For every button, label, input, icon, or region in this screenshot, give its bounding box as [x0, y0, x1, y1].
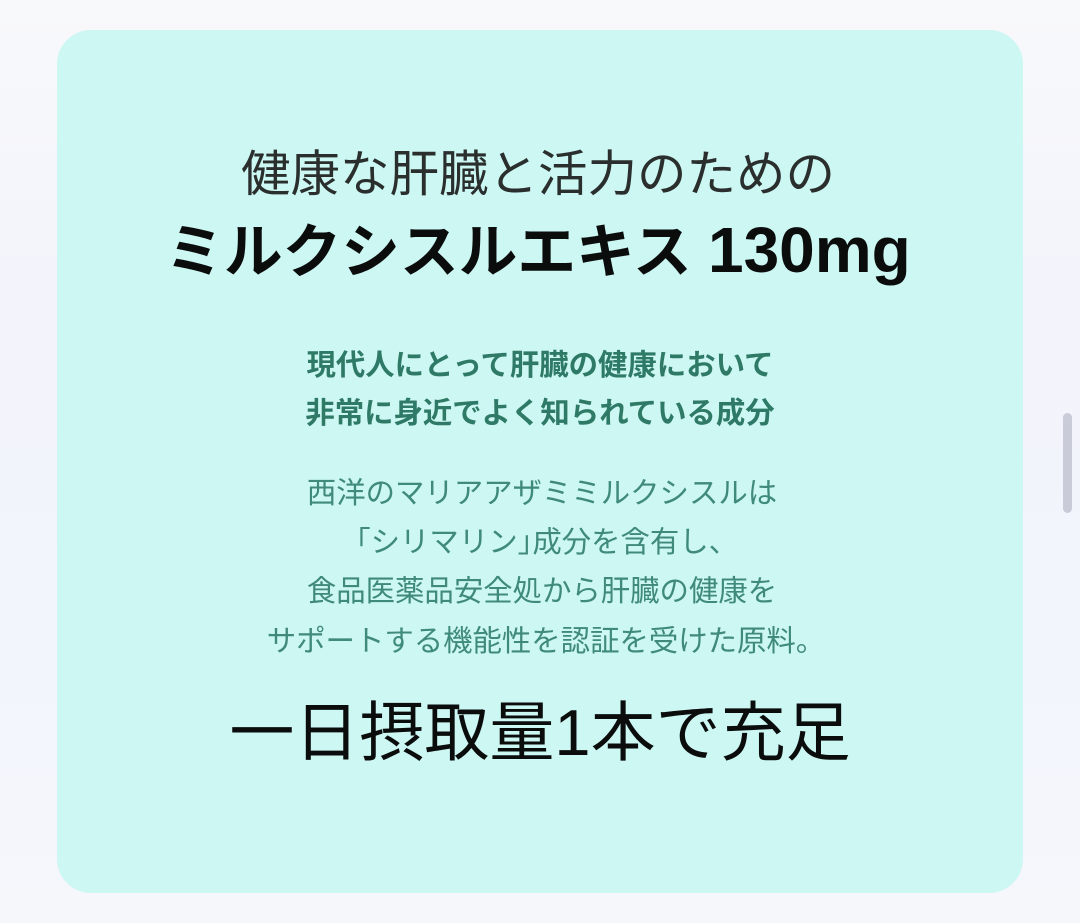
scrollbar: [1063, 413, 1072, 513]
subheading line 2: 非常に身近でよく知られている成分: [305, 397, 775, 430]
subheading line 1: 現代人にとって肝臓の健康において: [306, 349, 774, 382]
subheading: [305, 349, 775, 430]
description line 4: サポートする機能性を認証を受けた原料。: [267, 625, 825, 658]
heading line 1: 健康な肝臓と活力のための: [241, 147, 835, 202]
description text: [267, 477, 825, 658]
heading line 2: ミルクシスルエキス 130mg: [165, 214, 911, 286]
dosage statement: 一日摂取量1本で充足: [229, 696, 851, 769]
description line 2: 「シリマリン」成分を含有し、: [356, 526, 738, 559]
description line 3: 食品医薬品安全処から肝臓の健康を: [307, 575, 777, 608]
heading: [165, 147, 911, 286]
description line 1: 西洋のマリアアザミミルクシスルは: [307, 477, 777, 510]
